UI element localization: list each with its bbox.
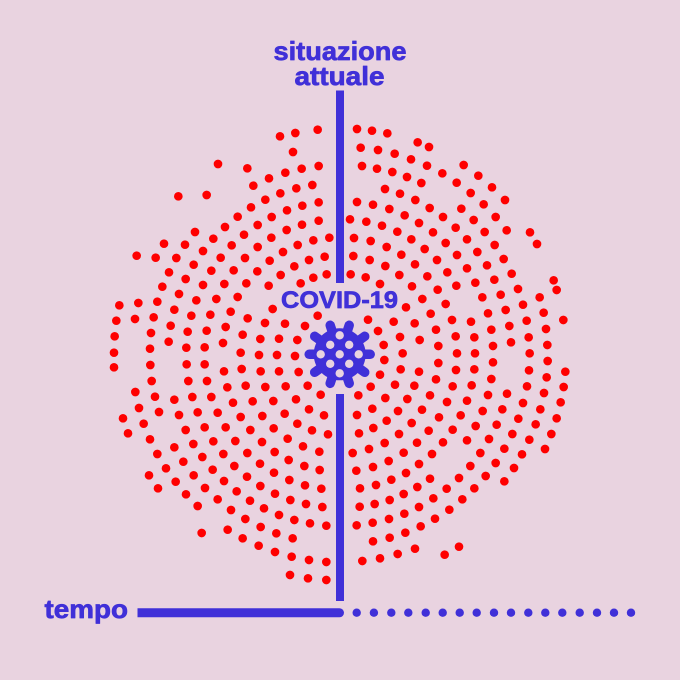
title: situazione attuale xyxy=(274,36,406,91)
dots: lower right quadrant xyxy=(353,353,565,561)
title: situazione attuale: attuale xyxy=(294,61,384,91)
dots: lower left quadrant xyxy=(114,353,328,580)
label: tempo: tempo xyxy=(44,594,128,624)
icon: virus xyxy=(309,325,370,383)
time axis: future dots xyxy=(352,608,635,617)
dots: upper right quadrant xyxy=(350,129,563,346)
vertical axis, lower segment xyxy=(336,394,344,601)
title: situazione attuale: situazione xyxy=(274,36,406,66)
dots: upper left quadrant xyxy=(115,130,329,349)
vertical axis, upper segment xyxy=(336,90,344,283)
label: COVID-19: COVID-19 xyxy=(281,287,398,314)
time axis: past solid bar xyxy=(138,608,344,617)
